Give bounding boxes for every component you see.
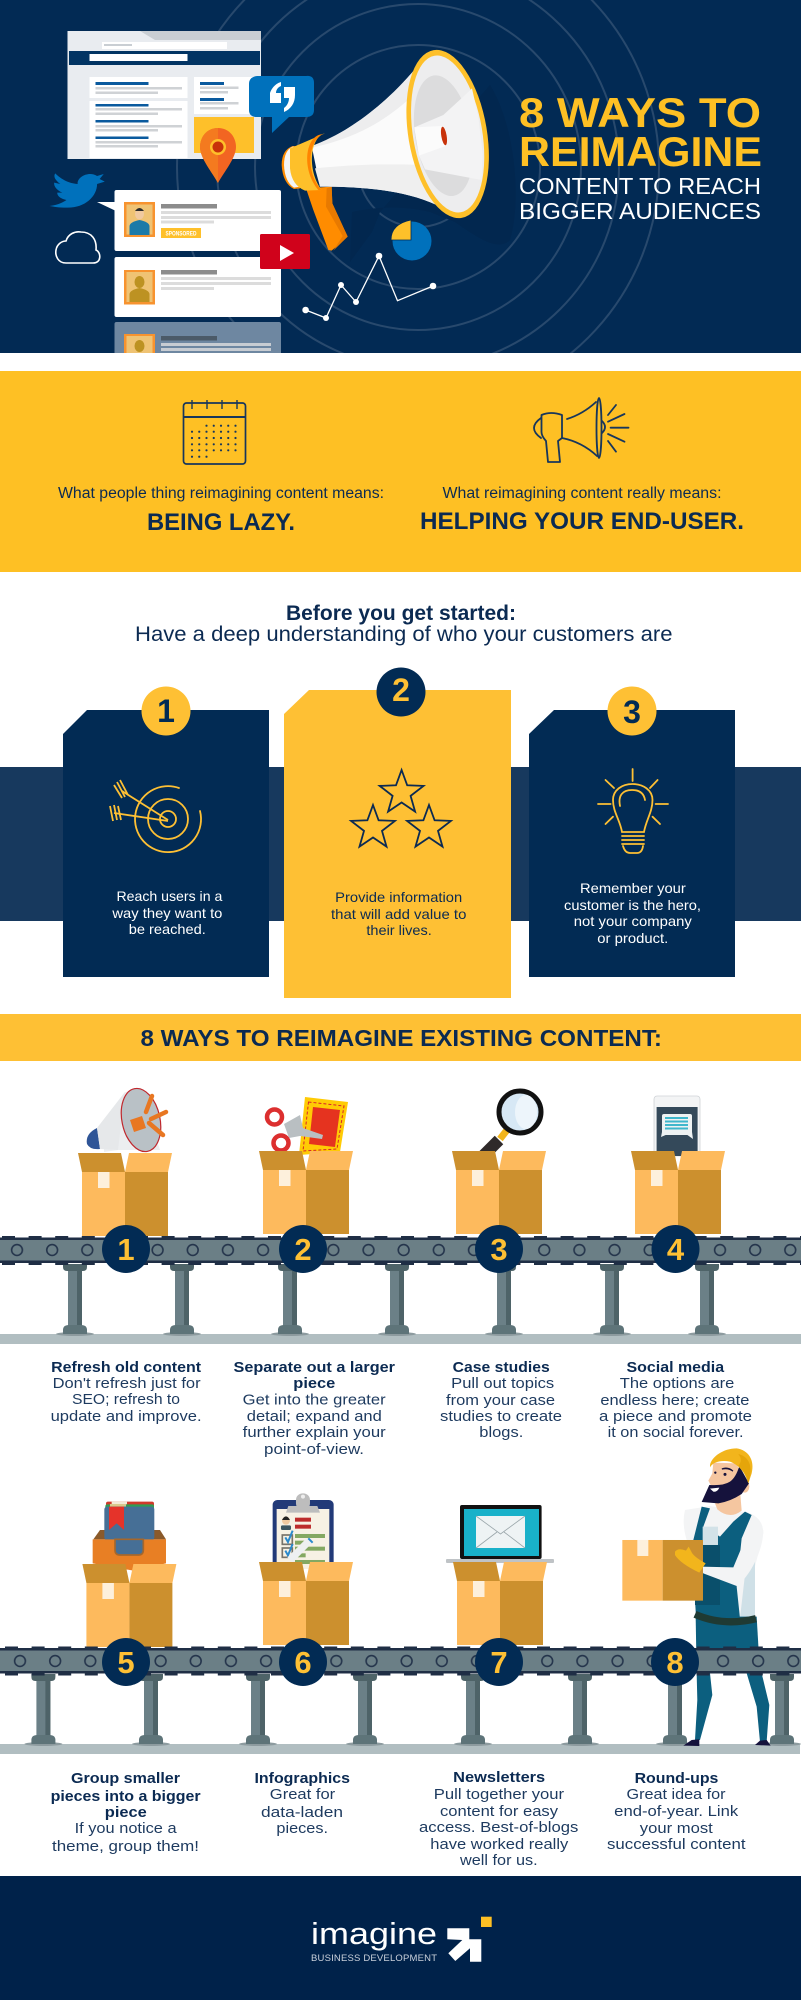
step 1 text: SEO; refresh to xyxy=(72,1391,180,1408)
text xyxy=(111,888,223,937)
title xyxy=(519,89,762,224)
step 1 text: Don't refresh just for xyxy=(53,1375,201,1392)
step 4 text: it on social forever. xyxy=(608,1424,744,1441)
social card: sponsored xyxy=(97,190,281,251)
step 8 text xyxy=(607,1770,746,1853)
text xyxy=(331,889,467,938)
step 7 text: well for us. xyxy=(459,1852,538,1869)
text: that will add value to xyxy=(331,906,467,922)
number badges one to four xyxy=(102,1225,700,1273)
worker belt xyxy=(695,1614,756,1622)
logo wordmark: imagine xyxy=(311,1916,437,1951)
step 8 text: your most xyxy=(640,1820,714,1837)
icon: pie chart xyxy=(391,220,432,260)
heading: before you get started: Have a deep understanding of who your customers are xyxy=(135,623,672,646)
icon: map pin xyxy=(200,128,236,183)
item: magnifying glass xyxy=(483,1091,541,1156)
step 2 text: piece xyxy=(293,1375,335,1392)
social card: second xyxy=(114,257,281,317)
number badges one to four: 1 xyxy=(117,1232,135,1267)
step 5 text: piece xyxy=(105,1804,147,1821)
cardboard boxes xyxy=(82,1562,547,1647)
step 6 text: data-laden xyxy=(261,1804,343,1821)
text xyxy=(564,880,701,946)
number badges five to eight xyxy=(102,1638,699,1686)
text: what people think: BEING LAZY. xyxy=(147,509,295,536)
step 1 text: Refresh old content xyxy=(51,1359,201,1376)
item: clipboard checklist xyxy=(273,1493,334,1569)
conveyor belt xyxy=(0,1648,801,1674)
step 8 text: successful content xyxy=(607,1836,746,1853)
text: what it really means: What reimagining content really means: xyxy=(442,485,722,502)
logo wordmark xyxy=(311,1916,437,1964)
heading band: 8 ways to reimagine existing content: 8 WAYS TO REIMAGINE EXISTING CONTENT: xyxy=(140,1025,662,1051)
text: be reached. xyxy=(129,921,206,937)
step 3 text: Case studies xyxy=(453,1359,550,1376)
step 4 text: a piece and promote xyxy=(599,1408,752,1425)
text: their lives. xyxy=(366,922,432,938)
step 7 text xyxy=(419,1769,578,1869)
number badges one to four: 3 xyxy=(490,1232,508,1267)
step 7 text: access. Best-of-blogs xyxy=(419,1819,578,1836)
conveyor legs xyxy=(56,1264,726,1336)
worker eyes xyxy=(714,1468,733,1476)
worker mouth xyxy=(710,1488,719,1492)
panel: myth versus reality band xyxy=(0,371,801,572)
step 4 text: Social media xyxy=(626,1359,725,1376)
title: REIMAGINE xyxy=(519,128,762,175)
step 8 text: end-of-year. Link xyxy=(614,1803,739,1820)
sound wave rings xyxy=(176,0,660,353)
worker shoes xyxy=(683,1739,771,1746)
worker shirt xyxy=(684,1506,763,1618)
cardboard boxes xyxy=(78,1151,725,1236)
icon: line megaphone xyxy=(534,398,628,462)
step 2 text: further explain your xyxy=(243,1424,386,1441)
text: Remember your xyxy=(580,880,686,896)
megaphone rear cap xyxy=(282,146,300,189)
panel: header xyxy=(0,0,801,353)
number badges one to four: 4 xyxy=(667,1232,685,1267)
step 2 text: Separate out a larger xyxy=(234,1359,395,1376)
step 7 text: have worked really xyxy=(430,1836,569,1853)
step 6 text: Infographics xyxy=(254,1770,350,1787)
logo wordmark: BUSINESS DEVELOPMENT xyxy=(311,1953,437,1964)
megaphone handle xyxy=(306,187,348,251)
step 7 text: Pull together your xyxy=(434,1786,564,1803)
social card: sponsored: SPONSORED xyxy=(166,230,197,238)
heading: before you get started: Before you get started: xyxy=(286,602,516,625)
step 7 text: Newsletters xyxy=(453,1769,545,1786)
text: Reach users in a xyxy=(116,888,223,904)
step 3 text: Pull out topics xyxy=(451,1375,554,1392)
card 3 xyxy=(529,686,735,977)
step 7 text: content for easy xyxy=(440,1803,559,1820)
worker arm xyxy=(700,1530,763,1586)
step 4 text xyxy=(599,1359,752,1441)
step 5 text xyxy=(51,1770,201,1855)
background band behind cards xyxy=(0,767,801,921)
icon: three stars xyxy=(351,770,451,847)
worker head xyxy=(702,1448,753,1515)
conveyor legs xyxy=(24,1674,801,1746)
step 8 text: Great idea for xyxy=(626,1786,726,1803)
browser window xyxy=(68,31,261,159)
number badge 3: 3 xyxy=(623,694,641,730)
footer xyxy=(0,1876,801,2000)
worker neck xyxy=(715,1490,742,1515)
worker ear xyxy=(740,1481,749,1493)
card 2 xyxy=(284,668,511,998)
worker glove xyxy=(675,1547,706,1573)
icon: light bulb xyxy=(598,769,668,853)
megaphone shadow xyxy=(350,85,516,262)
worker beard xyxy=(702,1466,749,1503)
number badge 1: 1 xyxy=(157,693,175,729)
text: what it really means: HELPING YOUR END-USER. xyxy=(420,508,744,535)
number badges five to eight: 7 xyxy=(490,1645,508,1680)
step 8 text: Round-ups xyxy=(635,1770,718,1787)
number badges five to eight: 5 xyxy=(117,1645,135,1680)
ground strip xyxy=(0,1744,800,1754)
logo mark arrow xyxy=(447,1917,492,1962)
item: laptop with envelope xyxy=(446,1505,554,1563)
conveyor belt xyxy=(0,1238,801,1263)
icon: cloud xyxy=(56,232,100,263)
number badges one to four: 2 xyxy=(294,1232,312,1267)
social card: third, faded xyxy=(114,322,281,353)
text: what people think: What people thing reimagining content means: xyxy=(58,485,384,502)
icon: quote speech bubble xyxy=(249,76,314,133)
step 5 text: pieces into a bigger xyxy=(51,1788,201,1805)
conveyor row two xyxy=(0,1448,801,1754)
item: scissors and coupon xyxy=(267,1097,348,1155)
step 6 text: Great for xyxy=(270,1786,335,1803)
item: megaphone xyxy=(87,1085,166,1155)
step 2 text: detail; expand and xyxy=(247,1408,382,1425)
step 4 text: The options are xyxy=(620,1375,734,1392)
step 1 text: update and improve. xyxy=(51,1408,202,1425)
ground strip xyxy=(0,1334,801,1344)
icon: twitter bird xyxy=(50,173,105,208)
text: way they want to xyxy=(111,905,223,921)
title: 8 WAYS TO xyxy=(519,89,761,136)
number badge 2: 2 xyxy=(392,672,410,708)
worker body xyxy=(683,1506,771,1746)
number badge 1 xyxy=(142,686,190,736)
heading: before you get started xyxy=(135,602,672,646)
text: what people think xyxy=(58,485,384,536)
icon: video play xyxy=(260,234,310,269)
title: CONTENT TO REACH xyxy=(519,173,761,199)
worker overalls xyxy=(693,1507,760,1673)
icon: calendar xyxy=(184,400,246,464)
card 1 xyxy=(63,686,269,977)
megaphone collar xyxy=(290,133,325,191)
step 2 text: point-of-view. xyxy=(264,1441,364,1458)
step 2 text: Get into the greater xyxy=(243,1392,386,1408)
text: not your company xyxy=(574,913,692,929)
step 6 text: pieces. xyxy=(276,1820,328,1837)
held box xyxy=(622,1540,703,1601)
title: BIGGER AUDIENCES xyxy=(519,198,761,224)
megaphone horn xyxy=(312,68,437,205)
item: folders in tray xyxy=(93,1502,166,1571)
number badges five to eight: 8 xyxy=(666,1645,684,1680)
step 3 text xyxy=(440,1359,562,1441)
step 5 text: If you notice a xyxy=(75,1820,177,1837)
text: Provide information xyxy=(335,889,462,905)
heading band: 8 ways to reimagine existing content xyxy=(0,1014,801,1061)
icon: target with arrows xyxy=(110,780,201,852)
number badges five to eight: 6 xyxy=(294,1645,312,1680)
step 3 text: from your case xyxy=(446,1392,555,1409)
step 1 text xyxy=(51,1359,202,1425)
line chart xyxy=(302,253,436,321)
worker arm and held box xyxy=(622,1530,763,1601)
text: or product. xyxy=(597,930,668,946)
text: customer is the hero, xyxy=(564,897,701,913)
text: what it really means xyxy=(420,485,744,535)
item: phone xyxy=(654,1096,700,1156)
step 5 text: Group smaller xyxy=(71,1770,180,1787)
worker xyxy=(622,1448,771,1746)
megaphone xyxy=(282,44,500,251)
step 2 text xyxy=(234,1359,395,1458)
conveyor row one xyxy=(0,1085,801,1344)
number badge 2 xyxy=(376,668,426,716)
number badge 3 xyxy=(608,686,656,736)
worker face xyxy=(708,1463,742,1493)
step 3 text: blogs. xyxy=(479,1424,523,1441)
step 6 text xyxy=(254,1770,350,1837)
worker hard hat xyxy=(710,1448,753,1483)
step 5 text: theme, group them! xyxy=(52,1838,199,1855)
step 3 text: studies to create xyxy=(440,1408,562,1425)
megaphone mouth xyxy=(395,44,500,224)
worker legs xyxy=(695,1673,769,1742)
step 4 text: endless here; create xyxy=(600,1392,749,1409)
